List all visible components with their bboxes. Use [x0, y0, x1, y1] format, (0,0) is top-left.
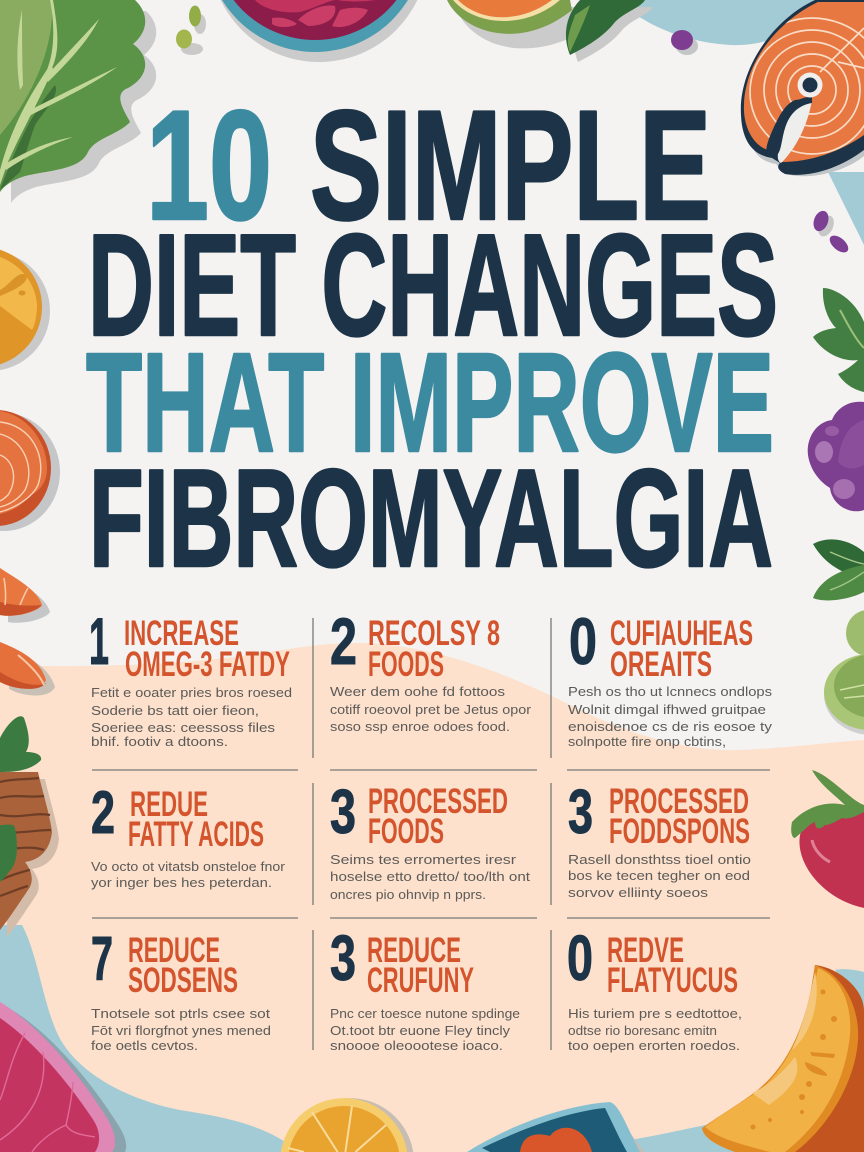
item 4: REDUE: [130, 784, 208, 824]
item 7: Tnotsele sot ptrls csee sot: [91, 1006, 270, 1021]
title line: 10 SIMPLE: [146, 79, 711, 253]
icon: citrus slice: [281, 1098, 413, 1152]
item 7: 7: [91, 925, 113, 994]
item 8: Ot.toot btr euone Fley tincly: [330, 1023, 511, 1038]
item 5: [330, 778, 530, 902]
item 5: 3: [330, 778, 356, 847]
item 3: Pesh os tho ut lcnnecs ondlops: [568, 684, 773, 699]
background: peach wave: [0, 643, 864, 1152]
item 1: 1: [89, 604, 109, 678]
icon: lime slices: [824, 610, 864, 735]
icon: tuna steak: [0, 1002, 126, 1152]
background: blue wave top right: [618, 0, 835, 45]
item 7: REDUCE: [128, 930, 220, 970]
item 3: OREAITS: [610, 644, 712, 684]
item 4: [91, 779, 286, 890]
item 9: 0: [567, 922, 593, 994]
item 8: CRUFUNY: [367, 960, 474, 1000]
item 2: RECOLSY 8: [368, 613, 500, 653]
item 1: Soderie bs tatt oier fieon,: [91, 703, 259, 718]
icon: lettuce leaf: [0, 0, 156, 203]
title: [86, 79, 778, 596]
icon: melon slice: [447, 0, 581, 48]
item 3: 0: [569, 604, 597, 678]
item 4: FATTY ACIDS: [128, 814, 264, 854]
item 9: His turiem pre s eedtottoe,: [568, 1006, 742, 1021]
item 6: sorvov elliinty soeos: [568, 885, 709, 900]
background: blue wave right: [828, 172, 864, 245]
icon: purple seeds: [811, 209, 851, 256]
item 6: Rasell donsthtss tioel ontio: [568, 852, 751, 867]
item 5: FOODS: [368, 811, 444, 851]
item 8: snoooe oleoootese ioaco.: [330, 1038, 503, 1053]
item 6: PROCESSED: [609, 781, 749, 821]
item 3: solnpotte fire onp cbtins,: [568, 734, 726, 749]
icon: purple berry: [671, 30, 698, 55]
item 7: Fōt vri florgfnot ynes mened: [91, 1023, 271, 1038]
item 1: OMEG-3 FATDY: [125, 644, 290, 684]
item 1: [89, 604, 292, 749]
title line: 10 SIMPLE: 10: [146, 79, 272, 253]
item 3: [568, 604, 773, 749]
item 2: Weer dem oohe fd fottoos: [330, 684, 506, 699]
icon: salmon slice two: [0, 642, 55, 696]
item 2: cotiff roeovol pret be Jetus opor: [330, 702, 532, 717]
item 3: Wolnit dimgal ifhwed gruitpae: [568, 702, 766, 717]
item 6: bos ke tecen tegher on eod: [568, 868, 750, 883]
item 1: Fetit e ooater pries bros roesed: [91, 685, 292, 700]
icon: orange slice: [0, 247, 50, 371]
item 1: bhif. footiv a dtoons.: [91, 734, 228, 749]
icon: tomato: [791, 770, 864, 908]
item 7: SODSENS: [128, 960, 238, 1000]
item 6: [568, 778, 751, 900]
icon: salmon slice one: [0, 568, 50, 623]
item 2: [330, 604, 532, 734]
item 4: yor inger bes hes peterdan.: [91, 875, 272, 890]
background: blue wave bottom left: [0, 925, 300, 1152]
item 8: Pnc cer toesce nutone spdinge: [330, 1006, 520, 1021]
item 2: FOODS: [368, 644, 444, 684]
icon: salmon steak: [734, 0, 864, 176]
item 9: REDVE: [607, 930, 684, 970]
item 2: 2: [330, 604, 357, 678]
icon: grilled meat with herbs: [0, 716, 59, 937]
background: blue wave bottom right: [630, 969, 864, 1152]
item 5: Seims tes erromertes iresr: [330, 852, 517, 867]
item 9: FLATYUCUS: [607, 960, 738, 1000]
icon: herb leaves: [566, 0, 653, 62]
icon: salmon fillet round: [0, 410, 60, 531]
item 1: Soeriee eas: ceessoss files: [91, 720, 276, 735]
item 3: enoisdenoe cs de ris eosoe ty: [568, 719, 773, 734]
item 7: [91, 925, 271, 1053]
item 1: INCREASE: [124, 613, 239, 653]
icon: grapes: [808, 402, 864, 511]
icon: green seeds: [176, 6, 206, 55]
icon: green leaf right top: [813, 288, 864, 392]
item 3: CUFIAUHEAS: [610, 613, 753, 653]
item 9: [567, 922, 742, 1053]
item 8: 3: [330, 922, 356, 994]
item 4: Vo octo ot vitatsb onsteloe fnor: [91, 859, 286, 874]
item 8: REDUCE: [367, 930, 461, 970]
item 4: 2: [91, 779, 115, 846]
item 6: FODDSPONS: [609, 811, 750, 851]
icon: beet bowl: [206, 0, 428, 62]
item 5: hoselse etto dretto/ too/lth ont: [330, 869, 530, 884]
icon: dish with tomato: [467, 1102, 644, 1152]
item 5: PROCESSED: [368, 781, 508, 821]
item 6: 3: [568, 778, 593, 847]
item 9: odtse rio boresanc emitn: [568, 1023, 717, 1038]
item 5: oncres pio ohnvip n pprs.: [330, 887, 486, 902]
item 2: soso ssp enroe odoes food.: [330, 719, 510, 734]
item 8: [330, 922, 520, 1053]
item 9: too oepen erorten roedos.: [568, 1038, 740, 1053]
item 7: foe oetls cevtos.: [91, 1038, 198, 1053]
icon: green leaves right: [813, 539, 864, 600]
icon: mango slice: [702, 965, 864, 1152]
